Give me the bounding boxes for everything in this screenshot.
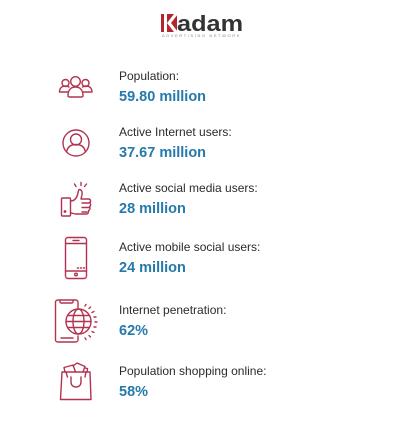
label: Internet penetration: [119,303,226,317]
icon: user in circle [63,130,89,156]
value: 37.67 million [119,145,206,161]
stat: internet penetration [119,303,226,339]
stat: population shopping online [119,364,266,400]
icon: phone with globe [56,300,97,342]
label: Population shopping online: [119,364,266,378]
label: Active social media users: [119,181,258,195]
value: 24 million [119,260,186,276]
logo wordmark: adam [177,11,243,36]
label: Active mobile social users: [119,240,260,254]
icon: shopping bag [60,363,91,400]
icon: thumbs up [62,182,91,216]
icon: group of people [60,77,92,97]
label: Population: [119,69,179,83]
label: Active Internet users: [119,125,232,139]
value: 58% [119,384,148,400]
stat: population [119,69,206,105]
value: 28 million [119,201,186,217]
logo tagline: ADVERTISING NETWORK [162,33,241,38]
stat: active internet users [119,125,232,161]
value: 62% [119,323,148,339]
logo: Kadam advertising network [161,11,243,38]
value: 59.80 million [119,89,206,105]
stat: active mobile social users [119,240,260,276]
icon: smartphone [66,238,86,278]
stat: active social media users [119,181,258,217]
logo mark: red k square [161,14,177,32]
